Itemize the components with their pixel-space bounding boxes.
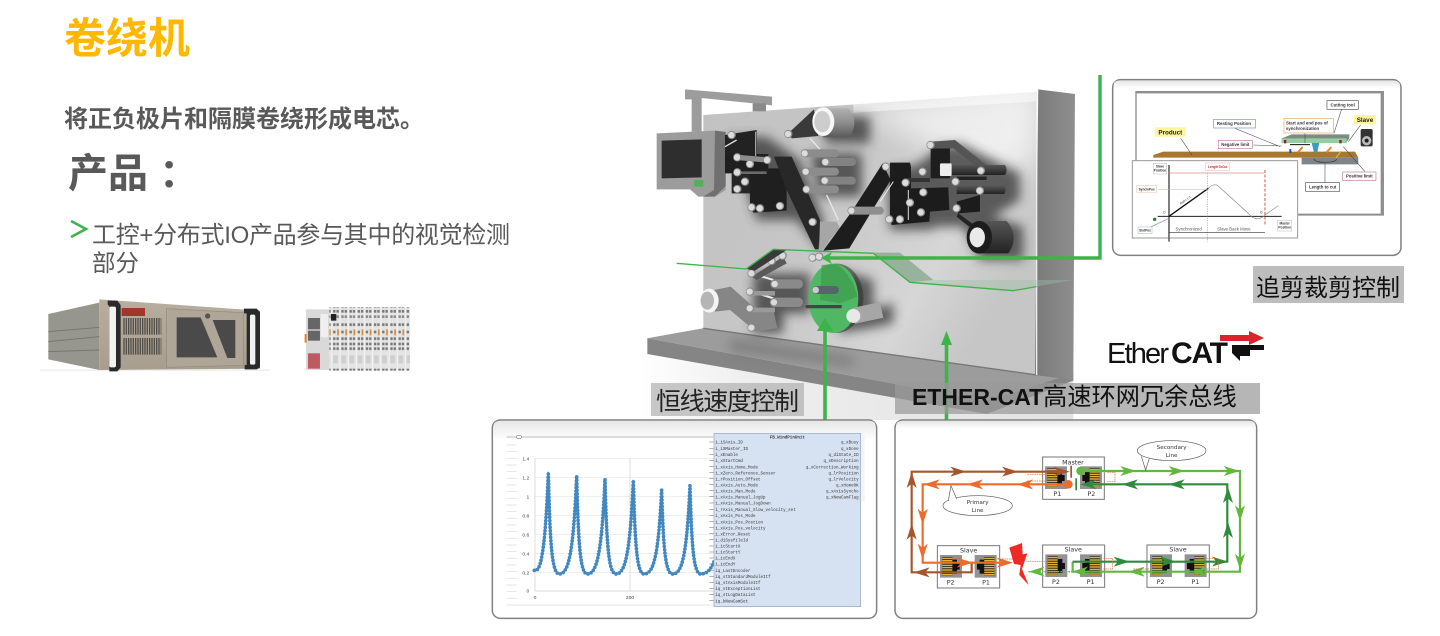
function block FB_WindPinUnit: i_icEndY (715, 563, 736, 568)
line chart: 0.4 (522, 551, 530, 557)
leader lines (1181, 109, 1365, 182)
function block FB_WindPinUnit: FB_WindPinUnit (770, 435, 805, 440)
tag: length to cut: Length to cut (1309, 185, 1337, 190)
function block FB_WindPinUnit: i_xAxis_Manual_JogUp (715, 495, 766, 500)
function block FB_WindPinUnit: iq_bNewCamSet (715, 599, 748, 604)
machine illustration (640, 87, 1075, 420)
under-plate shadow (730, 338, 853, 367)
dark right roller cluster (880, 140, 1007, 230)
function block FB_WindPinUnit: iq_stExceptionList (715, 587, 761, 592)
logo: EtherCAT: Ether (1107, 338, 1169, 370)
function block FB_WindPinUnit: i_xEnable (715, 453, 738, 458)
cutting tool (1282, 134, 1349, 162)
cam profile chart: SyncInPos (1139, 187, 1155, 191)
soft shadows (730, 117, 1023, 333)
support arm (685, 89, 772, 132)
callout: primary line: Line (972, 508, 984, 514)
break: red lightning (1009, 543, 1029, 585)
function block FB_WindPinUnit: iq_stLogDataList (715, 593, 756, 598)
tag: resting position (1214, 119, 1255, 128)
node: slave left: P2 (947, 580, 955, 587)
logo: EtherCAT: CAT (1171, 337, 1228, 370)
screen frame (1135, 91, 1384, 216)
function block FB_WindPinUnit: i_xAxis_Manual_JogDown (715, 502, 771, 507)
function block FB_WindPinUnit: q_xCorrection_Working (806, 465, 859, 470)
tag: positive limit (1343, 172, 1376, 180)
function block FB_WindPinUnit: q_xAxisSyncho (826, 489, 859, 494)
lower left reel and rollers (700, 251, 798, 332)
callout: secondary line: Line (1166, 453, 1178, 459)
cam profile chart: Slave (1156, 165, 1164, 169)
line chart (507, 435, 717, 605)
label: constant line speed control: 恒线速度控制 (656, 388, 799, 416)
node: slave right (1147, 545, 1209, 587)
function block FB_WindPinUnit: i_iSMaster_ID (715, 447, 748, 452)
function block FB_WindPinUnit: i_rPosition_Offset (715, 477, 761, 482)
arrow: to machine plate (941, 331, 952, 420)
secondary line dark green (1073, 478, 1233, 567)
panel: ethercat ring network (895, 420, 1257, 618)
bullet chevron (71, 221, 86, 237)
callout: primary line: Primary (967, 500, 989, 506)
tag: cutting tool (1327, 101, 1358, 109)
line chart: 0.6 (522, 532, 530, 538)
arrow: to cut control panel (821, 75, 1100, 264)
cam profile chart: SlotPos (1139, 229, 1151, 233)
function block FB_WindPinUnit: q_xDone (841, 448, 859, 452)
base front lip (647, 338, 1073, 414)
description text: 将正负极片和隔膜卷绕形成电芯。 (64, 106, 424, 133)
function block FB_WindPinUnit: i_icStartX (715, 545, 741, 550)
panel: speed chart and function block (492, 420, 877, 618)
line chart: 1 (527, 494, 530, 500)
function block FB_WindPinUnit: i_diSysfileId (715, 538, 748, 543)
node: master (1043, 457, 1104, 499)
function block FB_WindPinUnit: i_xAxis_Auto_Mode (715, 483, 759, 488)
node: slave right: P1 (1191, 579, 1199, 586)
function block FB_WindPinUnit: i_iSAxis_ID (715, 441, 743, 446)
cam profile chart: Ratio 1:1 (1179, 195, 1192, 206)
node: master: P1 (1053, 491, 1061, 498)
tag: length to cut (1306, 183, 1340, 191)
node: slave right: P2 (1157, 579, 1165, 586)
label: flying shear control: 追剪裁剪控制 (1256, 275, 1400, 302)
dark left roller cluster (725, 130, 820, 249)
primary line brown (907, 466, 1072, 577)
dashed port links (997, 472, 1218, 569)
function block FB_WindPinUnit: q_sDescription (823, 459, 859, 464)
function block FB_WindPinUnit: i_icStartY (715, 551, 741, 556)
node: slave middle (1043, 545, 1105, 587)
function block FB_WindPinUnit: q_xHomeOK (836, 484, 859, 488)
title: 卷绕机 (64, 15, 190, 62)
line chart: 0 (527, 589, 530, 595)
tag: product (1155, 127, 1186, 137)
secondary line light green (1028, 466, 1245, 577)
line chart: 0 (534, 595, 537, 601)
tag: sync position (1284, 118, 1333, 133)
cam profile chart: Position (1154, 169, 1166, 173)
line chart: 1.2 (522, 475, 530, 481)
green winding disc (806, 264, 882, 333)
function block FB_WindPinUnit: iq_stStandardModuleItf (715, 575, 771, 580)
top reel (784, 107, 854, 226)
bullet second line: 部分 (92, 250, 139, 276)
back plate (703, 92, 1037, 375)
callout: secondary line: Secondary (1157, 445, 1187, 451)
callout: secondary line (1137, 441, 1206, 470)
function block FB_WindPinUnit: q_lrPosition (828, 471, 859, 476)
function block FB_WindPinUnit: i_xAxis_Home_Mode (715, 465, 759, 470)
tag: slave: Slave (1357, 117, 1374, 124)
right pillar (1035, 89, 1075, 380)
tag: slave (1354, 115, 1376, 124)
cam profile chart: Slave Back Move (1217, 226, 1251, 231)
callout: primary line (943, 486, 1012, 516)
function block FB_WindPinUnit: i_xAxis_Pos_Mode (715, 514, 756, 519)
center V web (820, 163, 891, 251)
cam profile chart: LengthToCut (1208, 165, 1228, 169)
function block FB_WindPinUnit: q_xNewCamFlag (826, 495, 859, 500)
line chart: 0.2 (522, 570, 530, 576)
bullet line text: 工控+分布式IO产品参与其中的视觉检测 (92, 222, 510, 249)
node: master: Master (1062, 459, 1084, 466)
node: master: P2 (1087, 491, 1095, 498)
primary line orange (918, 479, 1073, 568)
tag: product: Product (1158, 129, 1183, 136)
cam profile chart: 0 (1260, 209, 1263, 214)
heading: products: 产品 ： (68, 152, 199, 196)
function block FB_WindPinUnit: q_diState_ID (828, 453, 859, 458)
green film path (677, 249, 1073, 291)
function block FB_WindPinUnit: iq_stAxisModuleItf (715, 581, 761, 586)
function block FB_WindPinUnit: q_lrVelocity (828, 477, 859, 482)
function block FB_WindPinUnit: q_xBusy (841, 442, 859, 446)
product strip (1153, 152, 1358, 158)
logo: EtherCAT (1107, 331, 1264, 370)
label: ethercat ring bus: ETHER-CAT高速环网冗余总线 (912, 384, 1237, 411)
node: slave left (937, 546, 1000, 588)
function block FB_WindPinUnit: i_xZero_Reference_Sensor (715, 471, 776, 476)
bullet text: products description (71, 221, 510, 276)
tag: negative limit (1218, 140, 1252, 148)
arrow: to winding disc (817, 318, 833, 420)
tag: sync position: synchronization (1286, 126, 1320, 131)
tag: negative limit: Negative limit (1221, 142, 1250, 147)
data curve (534, 472, 714, 574)
tag: cutting tool: Cutting tool (1331, 103, 1355, 108)
node: slave middle: P1 (1087, 579, 1095, 586)
function block FB_WindPinUnit: i_icEndX (715, 557, 736, 562)
monitor (657, 131, 726, 197)
cam profile chart: Position (1278, 226, 1291, 230)
product image: distributed IO module (305, 307, 410, 371)
lower right reel (967, 221, 1014, 254)
function block FB_WindPinUnit: iq_LastEncoder (715, 569, 751, 574)
label: flying shear control (1253, 266, 1404, 303)
node: slave left: P1 (982, 580, 990, 587)
tag: positive limit: Positive limit (1346, 174, 1373, 179)
line chart: 200 (626, 595, 634, 601)
panel: flying shear diagram (1113, 80, 1401, 255)
node: slave left: Slave (960, 547, 977, 554)
function block FB_WindPinUnit: i_xStartCmd (715, 459, 743, 464)
base top surface (647, 328, 1073, 401)
motor icon (1361, 129, 1373, 146)
tag: sync position: Start and end pos of (1286, 120, 1328, 125)
cam profile chart: Master (1280, 222, 1291, 226)
product image: industrial PC (40, 299, 270, 371)
function block FB_WindPinUnit (709, 432, 865, 607)
line chart: 1.4 (522, 456, 530, 462)
cam profile chart: 0 (1163, 209, 1166, 214)
cam profile chart: Synchronized (1176, 226, 1202, 231)
floor shadow (640, 350, 1073, 420)
node: slave middle: P2 (1052, 579, 1060, 586)
function block FB_WindPinUnit: i_xAxis_Pos_velocity (715, 526, 766, 531)
node: slave middle: Slave (1065, 547, 1082, 554)
function block FB_WindPinUnit: i_xAxis_Man_Mode (715, 489, 756, 494)
function block FB_WindPinUnit: i_xError_Reset (715, 532, 751, 537)
function block FB_WindPinUnit: i_xAxis_Pos_Postion (715, 520, 764, 525)
function block FB_WindPinUnit: i_rAxis_Manual_Slow_velocity_set (715, 508, 796, 513)
tag: resting position: Resting Position (1217, 121, 1251, 126)
line chart: 0.8 (522, 513, 530, 519)
cam profile chart (1132, 161, 1298, 242)
node: slave right: Slave (1169, 547, 1187, 554)
